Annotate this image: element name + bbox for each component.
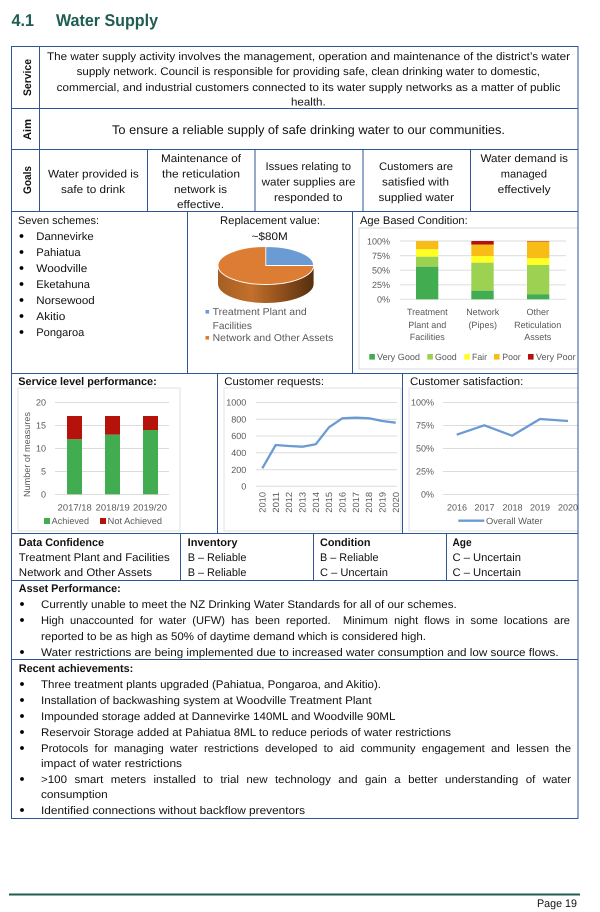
panel: seven schemes — [18, 215, 99, 339]
recent achievements heading: Recent achievements: — [19, 663, 133, 675]
service description: health. — [291, 96, 326, 108]
replacement value heading — [220, 215, 320, 243]
goal 5: effectively — [498, 184, 551, 196]
customer requests heading: Customer requests: — [224, 376, 324, 388]
panel: asset performance — [19, 583, 570, 659]
age column: C – Uncertain — [452, 552, 521, 564]
panel: recent achievements — [19, 663, 571, 817]
customer satisfaction heading: Customer satisfaction: — [410, 376, 523, 388]
goal 3: Issues relating to — [266, 161, 351, 173]
stacked bar chart: service levels: 5 — [41, 466, 46, 476]
schemes list: Pahiatua — [36, 247, 82, 259]
line chart: customer requests: 2014 — [311, 492, 321, 513]
page number: Page 19 — [537, 898, 577, 910]
goal 4: satisfied with — [382, 176, 449, 188]
recent achievements list: Protocols for managing water restrictions developed to aid community engagement and lessen the — [41, 743, 571, 755]
condition column: B – Reliable — [320, 552, 378, 564]
line chart: customer satisfaction: 0% — [421, 490, 434, 500]
recent achievements list: Three treatment plants upgraded (Pahiatua, Pongaroa, and Akitio). — [41, 679, 381, 691]
stacked bar chart: age condition: Facilities — [410, 332, 445, 342]
asset performance list: Water restrictions are being implemented due to increased water consumption and low source flows. — [41, 647, 559, 659]
data confidence labels: Treatment Plant and Facilities — [19, 552, 170, 564]
goal 3 — [261, 161, 356, 204]
line chart: customer requests: 200 — [231, 465, 246, 475]
line chart: customer requests: 400 — [231, 448, 246, 458]
age column: C – Uncertain — [452, 567, 521, 579]
service level legend: Achieved — [52, 516, 89, 526]
asset performance list: High unaccounted for water (UFW) has been reported. Minimum night flows in some locations are — [41, 615, 570, 627]
title: 4.1 — [12, 11, 34, 30]
panel: data confidence — [19, 537, 521, 579]
goal 5: Water demand is — [480, 153, 569, 165]
goal 5 — [480, 153, 569, 196]
goal 3: responded to — [274, 192, 342, 204]
asset performance heading: Asset Performance: — [19, 583, 121, 595]
stacked bar chart: service levels: 0 — [41, 490, 46, 500]
line chart: customer requests: 1000 — [226, 398, 246, 408]
line chart: customer satisfaction: 50% — [416, 444, 434, 454]
recent achievements list: impact of water restrictions — [41, 758, 183, 770]
goals label: Goals — [22, 166, 34, 194]
line chart: customer requests: 2018 — [364, 492, 374, 513]
goal 1 — [48, 168, 139, 196]
age column — [452, 537, 521, 579]
footer rule — [9, 894, 580, 896]
schemes list: Akitio — [36, 311, 65, 323]
replacement value heading: ~$80M — [252, 231, 288, 243]
line chart: customer requests: 2011 — [271, 492, 281, 513]
recent achievements list: Reservoir Storage added at Pahiatua 8ML to reduce periods of water restrictions — [41, 727, 452, 739]
stacked bar chart: service levels: 20 — [36, 398, 46, 408]
asset performance list: Currently unable to meet the NZ Drinking Water Standards for all of our schemes. — [41, 599, 457, 611]
title — [12, 11, 159, 30]
title: Water Supply — [56, 11, 159, 30]
line chart: customer requests: 2012 — [284, 492, 294, 513]
service description: The water supply activity involves the management, operation and maintenance of the district’s water — [47, 51, 570, 63]
age condition legend: Fair — [472, 352, 487, 362]
age condition legend: Good — [435, 352, 457, 362]
line chart: customer requests: 800 — [231, 414, 246, 424]
age column: Age — [452, 537, 472, 549]
stacked bar chart: service levels — [18, 388, 180, 531]
stacked bar chart: service levels: 2019/20 — [133, 503, 167, 513]
stacked bar chart: age condition: 100% — [367, 236, 390, 246]
satisfaction legend: Overall Water — [486, 516, 543, 526]
schemes list: Norsewood — [36, 295, 95, 307]
pie legend: Treatment Plant and — [213, 307, 307, 318]
line chart: customer satisfaction: 100% — [411, 398, 434, 408]
age condition heading: Age Based Condition: — [360, 215, 468, 227]
condition column — [320, 537, 388, 579]
stacked bar chart: age condition: (Pipes) — [468, 320, 497, 330]
recent achievements list: Impounded storage added at Dannevirke 140ML and Woodville 90ML — [41, 711, 395, 723]
data confidence labels — [19, 537, 170, 579]
goal 3: water supplies are — [261, 176, 356, 188]
line chart: customer requests: 2019 — [378, 492, 388, 513]
goal 1: safe to drink — [61, 184, 126, 196]
panel: goals — [22, 153, 569, 211]
schemes list: Pongaroa — [36, 327, 85, 339]
panel: replacement value — [206, 215, 333, 344]
service level heading: Service level performance: — [18, 376, 157, 388]
service description: supply network. Council is responsible for providing safe, clean drinking water to domestic, — [77, 66, 540, 78]
schemes list: Eketahuna — [36, 279, 91, 291]
goal 4 — [378, 161, 454, 204]
service label: Service — [22, 59, 34, 96]
goal 2 — [161, 153, 242, 211]
stacked bar chart: age condition: Network — [466, 307, 500, 317]
stacked bar chart: age condition: Treatment — [407, 307, 448, 317]
stacked bar chart: service levels: 2018/19 — [96, 503, 130, 513]
recent achievements list: consumption — [41, 789, 108, 801]
service description — [47, 51, 570, 108]
goal 2: the reticulation — [162, 168, 240, 180]
panel: service level performance — [18, 376, 180, 531]
condition column: C – Uncertain — [320, 567, 388, 579]
stacked bar chart: service levels: 15 — [36, 420, 46, 430]
aim statement: To ensure a reliable supply of safe drinking water to our communities. — [112, 123, 505, 137]
line chart: customer satisfaction: 2019 — [530, 503, 550, 513]
age condition legend — [369, 354, 576, 362]
table frame — [12, 46, 578, 818]
schemes list: Dannevirke — [36, 231, 94, 243]
aim label: Aim — [22, 119, 34, 140]
goal 4: supplied water — [378, 192, 454, 204]
line chart: customer satisfaction: 25% — [416, 466, 434, 476]
stacked bar chart: age condition: Plant and — [408, 320, 446, 330]
line chart: customer satisfaction: 2018 — [502, 503, 523, 513]
line chart: customer requests — [224, 388, 401, 531]
line chart: customer satisfaction: 2020 — [558, 503, 578, 513]
stacked bar chart: age condition: Other — [526, 307, 549, 317]
schemes list — [20, 231, 95, 339]
y axis title: Number of measures — [22, 412, 32, 497]
satisfaction legend — [458, 518, 543, 524]
line chart: customer requests: 2020 — [391, 492, 401, 513]
recent achievements list: Identified connections without backflow preventors — [41, 805, 306, 817]
stacked bar chart: age condition: 75% — [372, 251, 390, 261]
goal 2: effective. — [177, 199, 224, 211]
panel: customer requests — [224, 376, 401, 531]
panel: customer satisfaction — [408, 377, 578, 532]
data confidence labels: Data Confidence — [19, 537, 104, 549]
pie legend: Facilities — [213, 321, 252, 332]
stacked bar chart: service levels: 10 — [36, 444, 46, 454]
panel: age based condition — [359, 215, 599, 369]
line chart: customer satisfaction: 75% — [416, 420, 434, 430]
stacked bar chart: age condition: 50% — [372, 266, 390, 276]
data confidence labels: Network and Other Assets — [19, 567, 153, 579]
stacked bar chart: age condition: Reticulation — [514, 320, 561, 330]
service level legend — [44, 516, 162, 526]
stacked bar chart: age condition: 0% — [377, 295, 390, 305]
stacked bar chart: service levels: 2017/18 — [58, 503, 92, 513]
line chart: customer satisfaction — [408, 388, 578, 532]
replacement value heading: Replacement value: — [220, 215, 320, 227]
goal 4: Customers are — [379, 161, 453, 173]
pie legend: Network and Other Assets — [213, 333, 333, 344]
service description: commercial, and industrial customers connected to its water supply networks as a matter of public — [57, 82, 561, 94]
goal 1: Water provided is — [48, 168, 139, 180]
goal 2: network is — [174, 184, 228, 196]
inventory column: Inventory — [188, 537, 238, 549]
age condition legend: Poor — [502, 352, 521, 362]
asset performance list — [20, 599, 570, 659]
line chart: customer requests: 2016 — [338, 492, 348, 513]
condition column: Condition — [320, 537, 371, 549]
line chart: customer requests: 0 — [241, 482, 246, 492]
inventory column: B – Reliable — [188, 567, 246, 579]
stacked bar chart: age condition: Assets — [524, 332, 552, 342]
line chart: customer requests: 2010 — [258, 492, 268, 513]
recent achievements list — [20, 679, 571, 817]
service level legend: Not Achieved — [108, 516, 162, 526]
age condition legend: Very Good — [377, 352, 420, 362]
line chart: customer requests: 2013 — [298, 492, 308, 513]
line chart: customer satisfaction: 2016 — [447, 503, 467, 513]
line chart: customer requests: 2017 — [351, 492, 361, 513]
schemes list: Woodville — [36, 263, 87, 275]
panel: service — [22, 51, 570, 108]
pie legend — [206, 307, 333, 344]
recent achievements list: >100 smart meters installed to trial new technology and gain a better understanding of water — [41, 774, 571, 786]
line chart: customer requests: 600 — [231, 431, 246, 441]
asset performance list: reported to be as high as 50% of daytime demand which is considered high. — [41, 631, 426, 643]
panel: aim — [22, 119, 505, 140]
recent achievements list: Installation of backwashing system at Woodville Treatment Plant — [41, 695, 372, 707]
goal 2: Maintenance of — [161, 153, 242, 165]
stacked bar chart: age condition — [359, 228, 599, 369]
goal 5: managed — [501, 168, 547, 180]
line chart: customer requests: 2015 — [324, 492, 334, 513]
pie chart — [218, 246, 314, 303]
stacked bar chart: age condition: 25% — [372, 280, 390, 290]
line chart: customer satisfaction: 2017 — [474, 503, 495, 513]
inventory column — [188, 537, 246, 579]
schemes heading: Seven schemes: — [18, 215, 99, 227]
inventory column: B – Reliable — [188, 552, 246, 564]
age condition legend: Very Poor — [536, 352, 576, 362]
